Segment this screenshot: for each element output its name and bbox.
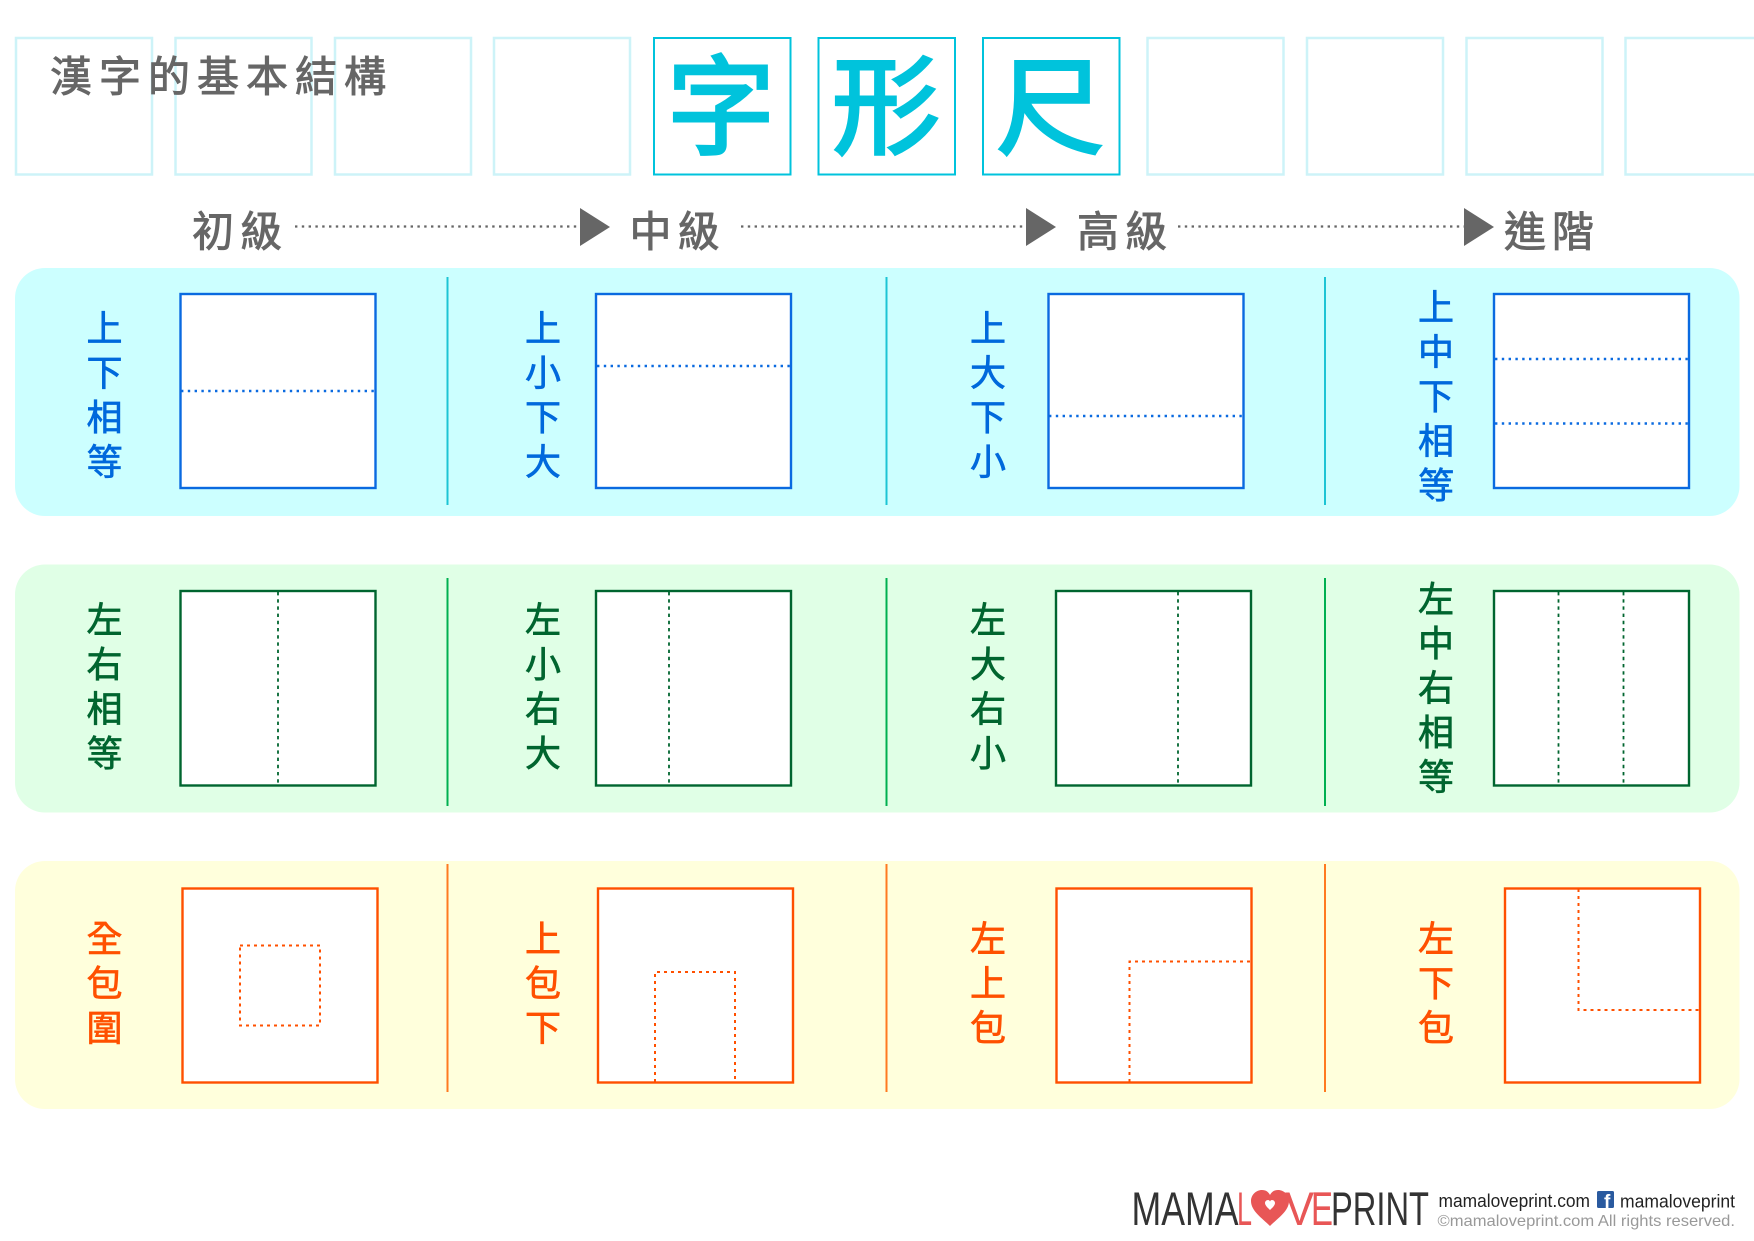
- main title: 字形尺: [654, 38, 1120, 174]
- level progression arrow row: 進階: [1504, 208, 1600, 256]
- footer logo: MAMALOVEPRINT: PRINT: [1331, 1182, 1429, 1235]
- level progression arrow row: 中級: [630, 208, 726, 256]
- 上中下相等: [1418, 287, 1689, 506]
- 左下包: 下: [1418, 963, 1454, 1004]
- 左中右相等: 左: [1418, 579, 1454, 620]
- 左右相等: 等: [86, 733, 123, 774]
- 上小下大: [525, 294, 791, 488]
- icon: facebook: [1597, 1191, 1614, 1213]
- 左上包: 左: [970, 918, 1006, 960]
- 左大右小: 左: [970, 600, 1006, 640]
- main title: 字形尺: 形: [832, 48, 940, 168]
- 上中下相等: 中: [1418, 332, 1454, 372]
- 全包圍: [86, 888, 378, 1082]
- 左中右相等: 等: [1418, 756, 1454, 798]
- panel: enclosing structures: [15, 861, 1740, 1109]
- 左下包: 左: [1418, 918, 1454, 960]
- 上小下大: 小: [525, 352, 561, 394]
- 左大右小: 大: [970, 644, 1006, 685]
- panel: top-bottom structures: [15, 268, 1740, 516]
- 左右相等: 相: [86, 688, 123, 730]
- 上包下: 包: [525, 963, 561, 1004]
- 左中右相等: 中: [1418, 623, 1454, 664]
- footer logo: MAMALOVEPRINT: V: [1285, 1182, 1315, 1235]
- 上包下: 下: [525, 1008, 561, 1048]
- icon: facebook: f: [1604, 1192, 1611, 1213]
- 上中下相等: 等: [1418, 465, 1454, 506]
- 全包圍: 圍: [86, 1008, 123, 1048]
- 左下包: 包: [1418, 1008, 1454, 1048]
- 上小下大: 下: [525, 397, 561, 438]
- 上大下小: [970, 294, 1244, 488]
- 上中下相等: 相: [1418, 420, 1454, 462]
- 上中下相等: 下: [1418, 376, 1454, 417]
- 上中下相等: 上: [1418, 287, 1454, 328]
- 上大下小: 上: [970, 308, 1006, 349]
- 上大下小: 小: [970, 442, 1006, 482]
- 上下相等: 等: [86, 442, 123, 482]
- 左大右小: [970, 591, 1251, 786]
- footer: facebook handle: mamaloveprint: [1620, 1192, 1735, 1212]
- footer: copyright: ©mamaloveprint.com All rights reserved.: [1438, 1213, 1735, 1230]
- 上下相等: [86, 294, 376, 488]
- level progression arrow row: 初級: [192, 208, 288, 256]
- footer logo: MAMALOVEPRINT: L: [1237, 1182, 1252, 1235]
- 左小右大: [525, 591, 791, 786]
- icon: heart: [1251, 1190, 1289, 1226]
- 左大右小: 右: [970, 688, 1006, 730]
- 左中右相等: 相: [1418, 712, 1454, 753]
- level progression arrow row: 高級: [1077, 208, 1173, 256]
- 左上包: [970, 888, 1252, 1082]
- 左上包: 包: [970, 1008, 1006, 1048]
- subtitle: 漢字的基本結構: [50, 54, 393, 100]
- header: row of writing grid boxes: [16, 38, 1754, 174]
- 左上包: 上: [970, 963, 1006, 1004]
- main title: 字形尺: 尺: [996, 48, 1104, 168]
- 左小右大: 大: [525, 733, 561, 774]
- 上大下小: 下: [970, 397, 1006, 438]
- 左小右大: 右: [525, 688, 561, 730]
- 上小下大: 上: [525, 308, 561, 349]
- footer logo: MAMALOVEPRINT: MAMA: [1132, 1182, 1239, 1235]
- 上包下: [525, 888, 793, 1082]
- 上包下: 上: [525, 918, 561, 960]
- 左中右相等: [1418, 579, 1689, 798]
- panel: left-right structures: [15, 564, 1740, 812]
- 左右相等: [86, 591, 376, 786]
- 左下包: [1418, 888, 1700, 1082]
- footer: website: mamaloveprint.com: [1438, 1191, 1590, 1211]
- 全包圍: 包: [86, 963, 123, 1004]
- 左小右大: 左: [525, 600, 561, 640]
- 上大下小: 大: [970, 352, 1006, 394]
- 左右相等: 右: [86, 644, 123, 685]
- 左中右相等: 右: [1418, 668, 1454, 708]
- footer logo: MAMALOVEPRINT: E: [1311, 1182, 1333, 1235]
- level progression arrow row: [192, 208, 1600, 256]
- 上下相等: 上: [86, 308, 123, 349]
- footer logo: MAMALOVEPRINT: [1132, 1182, 1429, 1235]
- 全包圍: 全: [86, 918, 123, 960]
- 上下相等: 相: [86, 397, 123, 438]
- 上下相等: 下: [86, 352, 123, 394]
- 左右相等: 左: [86, 600, 123, 640]
- main title: 字形尺: 字: [667, 48, 775, 168]
- 上小下大: 大: [525, 442, 561, 482]
- 左大右小: 小: [970, 733, 1006, 774]
- 左小右大: 小: [525, 644, 561, 685]
